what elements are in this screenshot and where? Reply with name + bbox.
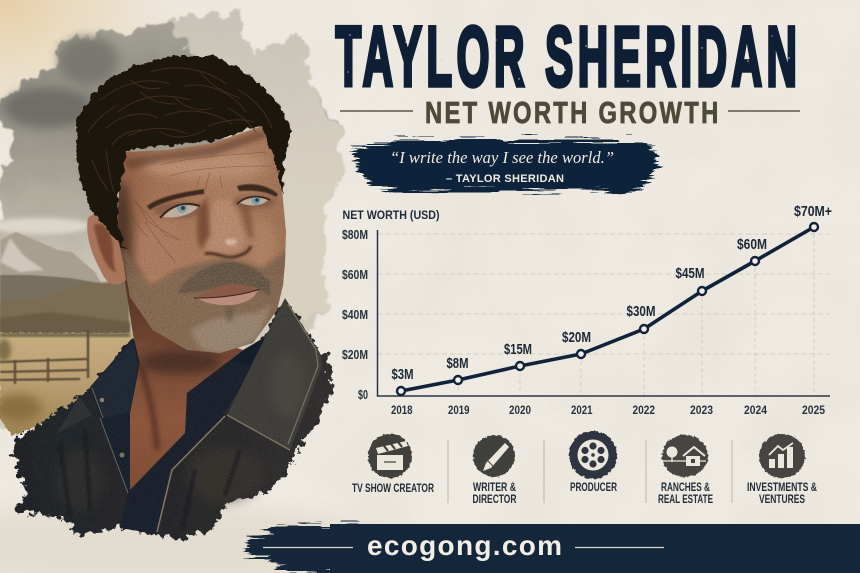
jacket silhouette [12, 298, 333, 540]
shadow under hairline [122, 130, 270, 170]
x axis years: 2022 [632, 403, 655, 417]
left shirt collar [90, 340, 138, 418]
x axis years: 2020 [509, 403, 531, 417]
footer banner [245, 523, 860, 573]
label: TV show creator: TV SHOW CREATOR [352, 483, 434, 495]
value labels [392, 203, 832, 383]
y axis labels: $60M [342, 267, 368, 282]
value labels: $60M [737, 236, 767, 253]
portrait: man in front of ranch landscape [0, 14, 345, 550]
x axis years: 2019 [448, 403, 470, 417]
label: ranches and real estate [658, 482, 713, 506]
x axis years: 2024 [744, 403, 767, 417]
data line [401, 227, 814, 391]
brush stroke [352, 140, 658, 192]
label: investments and ventures [747, 482, 817, 506]
neck [122, 262, 243, 490]
footer brush stroke [245, 523, 860, 573]
grid and axes [378, 227, 830, 396]
label: writer and director: WRITER & [473, 482, 516, 494]
title: TAYLOR SHERIDAN [336, 11, 802, 104]
x axis years [391, 403, 825, 417]
face [117, 126, 286, 353]
label: ranches and real estate: RANCHES & [661, 482, 710, 494]
value labels: $15M [504, 341, 532, 358]
moustache [178, 262, 270, 296]
icon: growth chart [759, 434, 805, 478]
value labels: $20M [562, 329, 591, 346]
label: writer and director: DIRECTOR [472, 494, 517, 506]
data points [397, 223, 818, 395]
landscape backdrop [0, 14, 345, 440]
mouth [194, 285, 260, 305]
x axis years: 2018 [391, 403, 413, 417]
x axis years: 2021 [571, 403, 593, 417]
eye sockets [154, 202, 206, 218]
label: producer: PRODUCER [570, 482, 617, 494]
right collar [227, 298, 322, 450]
ear [87, 214, 126, 285]
chin highlight [190, 305, 272, 353]
y axis labels: $20M [342, 347, 368, 362]
label: ranches and real estate: REAL ESTATE [658, 494, 713, 506]
footer text: ecogong.com [367, 530, 562, 561]
label: investments and ventures: INVESTMENTS & [747, 482, 817, 494]
value labels: $45M [676, 265, 704, 282]
x axis years: 2025 [802, 403, 825, 417]
y axis labels: $0 [358, 387, 368, 402]
quote attribution: – TAYLOR SHERIDAN [446, 173, 564, 185]
icon: pen [473, 435, 515, 477]
y axis labels: $40M [342, 307, 368, 322]
value labels: $30M [626, 303, 656, 320]
icon: clapperboard [368, 434, 412, 478]
icon: ranch house [662, 435, 708, 477]
x axis years: 2023 [690, 403, 713, 417]
eyebrows [147, 189, 204, 210]
forehead lines [160, 152, 272, 190]
chart axis title: NET WORTH (USD) [342, 208, 440, 222]
value labels: $8M [446, 355, 468, 372]
quote text: “I write the way I see the world.” [390, 148, 614, 167]
y axis labels [342, 227, 368, 402]
value labels: $3M [392, 366, 414, 383]
beard base [122, 248, 286, 353]
icon: film reel [569, 431, 617, 479]
value labels: $70M+ [794, 203, 832, 220]
eyes [160, 196, 270, 218]
label: writer and director [472, 482, 517, 506]
shirt [90, 330, 277, 534]
y axis labels: $80M [342, 227, 368, 242]
subtitle: NET WORTH GROWTH [425, 95, 721, 130]
net worth line chart [342, 203, 832, 417]
label: investments and ventures: VENTURES [759, 494, 805, 506]
career categories row [352, 431, 817, 506]
jacket details [11, 298, 333, 541]
hair [76, 56, 291, 250]
quote brush banner [352, 140, 658, 192]
